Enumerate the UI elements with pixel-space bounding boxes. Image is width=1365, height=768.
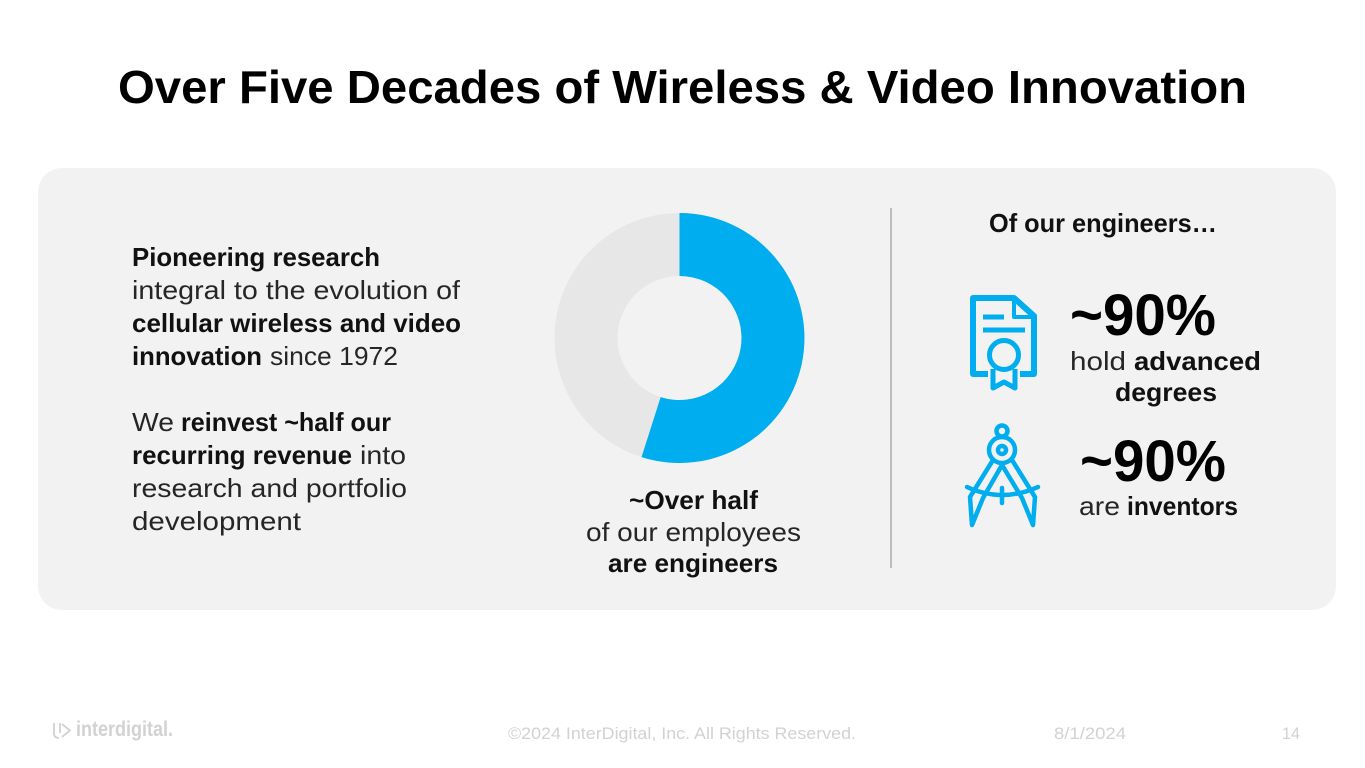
footer page number: 14 — [1282, 724, 1300, 743]
stat: advanced degrees: degrees — [1115, 377, 1217, 407]
stat: inventors: inventors — [1127, 491, 1238, 521]
footer logo: interdigital. — [76, 718, 173, 741]
donut caption: are engineers — [608, 548, 778, 578]
text block: reinvestment: development — [132, 506, 302, 536]
text block: reinvestment: into — [360, 440, 406, 470]
text block: pioneering research: innovation — [132, 341, 262, 371]
donut caption: of our employees — [586, 517, 801, 547]
text block: pioneering research — [132, 242, 461, 371]
stat: advanced degrees: advanced — [1134, 346, 1261, 376]
stat: inventors: are — [1079, 491, 1120, 521]
heading: of our engineers: Of our engineers… — [989, 208, 1217, 238]
text block: pioneering research: cellular wireless and video — [132, 308, 461, 338]
stat: advanced degrees — [1070, 283, 1261, 407]
stat: advanced degrees: ~90% — [1070, 283, 1216, 348]
donut caption — [586, 485, 801, 578]
text block: pioneering research: Pioneering research — [132, 242, 380, 272]
icon: certificate — [973, 298, 1034, 388]
text block: reinvestment: recurring revenue — [132, 440, 352, 470]
text block: reinvestment — [132, 407, 407, 536]
text block: pioneering research: integral to the evolution of — [132, 275, 461, 305]
donut chart — [586, 213, 804, 463]
text block: reinvestment: research and portfolio — [132, 473, 407, 503]
footer date: 8/1/2024 — [1054, 724, 1126, 743]
stat: inventors: ~90% — [1080, 429, 1226, 494]
text block: pioneering research: since 1972 — [270, 341, 398, 371]
stat: inventors — [1079, 429, 1238, 521]
footer copyright: ©2024 InterDigital, Inc. All Rights Reserved. — [508, 724, 856, 743]
icon: compass — [967, 426, 1038, 525]
title: Over Five Decades of Wireless & Video Innovation — [118, 61, 1247, 113]
text block: reinvestment: We — [132, 407, 174, 437]
panel: background — [38, 168, 1336, 610]
text block: reinvestment: reinvest ~half our — [181, 407, 391, 437]
donut caption: ~Over half — [629, 485, 758, 515]
stat: advanced degrees: hold — [1070, 346, 1126, 376]
